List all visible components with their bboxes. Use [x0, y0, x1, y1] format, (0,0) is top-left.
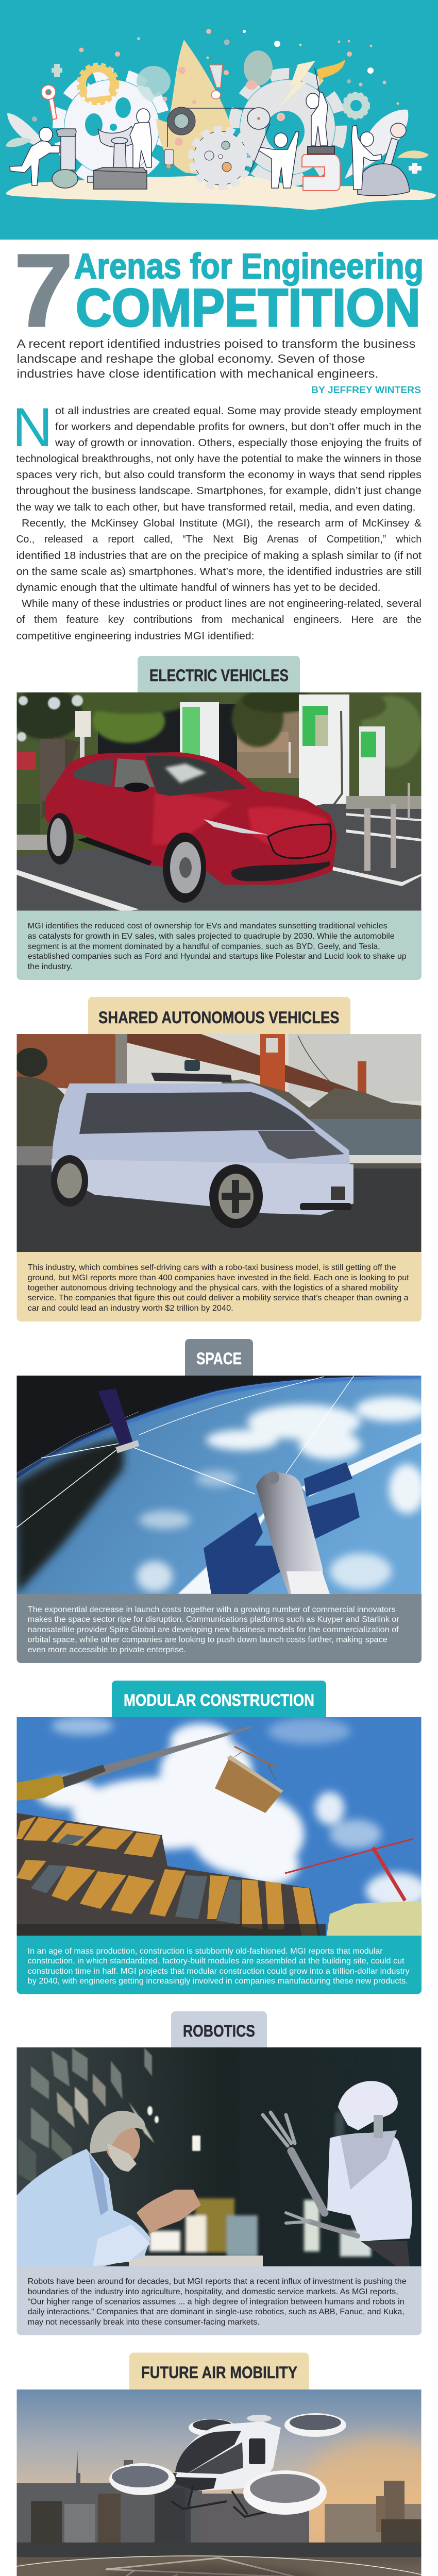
light bulbs	[137, 50, 273, 102]
paragraph 1: way of growth or innovation. Others, especially those enjoying the fruits of	[55, 437, 422, 449]
caption panel: robotics: “Our higher range of scenarios assumes ... a high degree of integration between humans and robots in	[28, 2298, 405, 2306]
tab: space: SPACE	[196, 1349, 242, 1368]
section: electric vehicles	[10, 656, 423, 980]
skids	[172, 2486, 268, 2517]
figure at lever	[351, 125, 382, 190]
tab: future air mobility	[129, 2352, 309, 2389]
paragraph 1: technological breakthroughs, not only have the potential to make the winners in those	[16, 453, 422, 465]
section: robotics	[16, 2011, 422, 2335]
white and grey leaves	[6, 110, 429, 179]
cream leaf shape	[156, 40, 232, 175]
van wheels	[51, 1155, 263, 1228]
helipad deck	[16, 2557, 422, 2576]
title	[14, 232, 424, 348]
caption panel: robotics: may not necessarily break into these consumer-facing markets.	[28, 2318, 260, 2327]
light beams	[178, 1433, 422, 1594]
lifted module	[215, 1747, 283, 1813]
caption panel: space	[16, 1594, 422, 1663]
caption panel: robotics: boundaries of the industry into agriculture, hospitality, and domestic service markets. As MGI reports,	[28, 2287, 398, 2296]
caption panel: electric vehicles: as catalysts for growth in EV sales, with sales projected to quadruple by 2030. While the automobile	[28, 932, 395, 941]
solar panels	[204, 1462, 360, 1594]
plus marks	[52, 64, 422, 174]
ground	[16, 1146, 53, 1165]
caption panel: robotics: Robots have been around for decades, but MGI reports that a recent influx of investment is pushing the	[28, 2277, 407, 2286]
figure on press	[130, 109, 151, 168]
caption panel: electric vehicles	[16, 911, 422, 980]
body text	[12, 396, 422, 642]
tab: electric vehicles: ELECTRIC VEHICLES	[149, 666, 289, 685]
worker figures	[10, 92, 382, 190]
intro deck: landscape and reshape the global economy. Seven of those	[16, 352, 365, 365]
tab: future air mobility: FUTURE AIR MOBILITY	[141, 2363, 297, 2382]
robot	[263, 2081, 412, 2266]
hills	[222, 1079, 422, 1121]
bolt machine	[52, 129, 78, 188]
rail	[16, 2543, 422, 2557]
photo: eVTOL over city helipad	[16, 2389, 438, 2576]
parking sign	[75, 711, 91, 758]
charging stations	[180, 694, 385, 806]
figure with flag	[306, 92, 328, 146]
man's hands	[137, 2190, 201, 2233]
yellow gear	[79, 65, 117, 103]
caption panel: modular construction: construction, in which standardized, factory-built modules are assembled at the building site, could cut	[28, 1957, 405, 1965]
paragraph 2	[16, 518, 422, 594]
clouds	[137, 1397, 428, 1592]
big white gear	[58, 74, 165, 181]
caption panel: shared autonomous vehicles: together autonomous driving technology and the physical cars, with the logistics of a shared mobility	[28, 1284, 398, 1292]
front gear	[192, 129, 249, 187]
photo: crane lifting building module	[16, 1717, 428, 1936]
figure pushing bolt	[10, 127, 60, 185]
confetti dots and plus signs	[79, 29, 386, 146]
caption panel: robotics	[16, 2266, 422, 2335]
intro deck: A recent report identified industries poised to transform the business	[16, 337, 415, 350]
pavement	[16, 804, 422, 911]
tab: space	[185, 1339, 253, 1376]
robot arms	[263, 2112, 358, 2236]
big grey gear	[234, 74, 341, 181]
caption panel: shared autonomous vehicles: This industry, which combines self-driving cars with a robo-taxi business model, is still getting off the	[28, 1263, 396, 1272]
caption panel: shared autonomous vehicles: car and could lead an industry worth $2 trillion by 2040.	[28, 1304, 233, 1313]
small gear	[344, 93, 368, 118]
caption panel: modular construction: construction time in half. MGI projects that modular construction could grow into a trillion-dollar industry	[28, 1967, 410, 1976]
roof sensor	[151, 1060, 232, 1082]
small satellite	[98, 1388, 140, 1453]
paragraph 1	[16, 405, 422, 513]
background lights	[149, 2112, 371, 2257]
tab: electric vehicles	[138, 656, 300, 692]
man's head	[90, 2111, 145, 2172]
paragraph 1: for workers and dependable profits for owners, but don’t offer much in the	[55, 421, 422, 433]
tab: shared autonomous vehicles: SHARED AUTONOMOUS VEHICLES	[98, 1008, 339, 1027]
lever dome	[358, 123, 410, 196]
van body	[52, 1083, 353, 1215]
intro deck: industries have close identification with mechanical engineers.	[16, 367, 378, 380]
caption panel: shared autonomous vehicles: service. The companies that figure this out could deliver a mobility service that’s cheaper than owning a	[28, 1294, 409, 1302]
caption panel: electric vehicles: segment is at the moment dominated by a handful of companies, such as BYD, Geely, and Tesla,	[28, 942, 380, 951]
caption panel: modular construction	[16, 1936, 422, 1994]
byline: BY JEFFREY WINTERS	[311, 385, 421, 395]
paragraph 2: Recently, the McKinsey Global Institute (MGI), the research arm of McKinsey &	[22, 518, 422, 529]
tower crane	[285, 1839, 413, 1901]
photo: man talking with humanoid robot	[16, 2047, 422, 2266]
flag	[315, 59, 345, 116]
city skyline	[16, 2450, 422, 2543]
caption panel: robotics: daily interactions.” Companies that are dominant in single-use robotics, such as ABB, Fanuc, and Kuka,	[28, 2308, 405, 2316]
caption panel: electric vehicles: MGI identifies the reduced cost of ownership for EVs and mandates sunsetting traditional vehicles	[28, 922, 388, 930]
paragraph 2: Co., released a report called, “The Next Big Arenas of Competition,” which	[16, 534, 422, 545]
paragraph 3: of them feature key contributions from mechanical engineers. Here are the	[16, 614, 422, 625]
caption panel: space: nanosatellite provider Spire Global are developing new business models for the commercialization of	[28, 1625, 399, 1634]
car body	[45, 752, 336, 885]
paragraph 3: While many of these industries or product lines are not engineering-related, several	[22, 598, 422, 609]
robot head	[338, 2081, 398, 2130]
key icon	[41, 85, 57, 120]
yellow building	[327, 1901, 421, 1936]
paragraph 1: the way we talk to each other, but have transformed retail, media, and even dating.	[16, 502, 416, 513]
title line 2: COMPETITION	[76, 278, 420, 338]
section: future air mobility	[16, 2352, 438, 2576]
paragraph 1: throughout the business landscape. Smartphones, for example, didn’t just change	[16, 485, 422, 497]
island ground	[6, 175, 436, 210]
section: modular construction	[16, 1681, 428, 1994]
bridge	[127, 1034, 366, 1093]
lightning bolt	[279, 61, 315, 107]
paragraph 1: ot all industries are created equal. Some may provide steady employment	[55, 405, 422, 417]
caption panel: shared autonomous vehicles	[16, 1252, 422, 1321]
caption panel: space: The exponential decrease in launch costs together with a growing number of commercial innovators	[28, 1605, 396, 1614]
tab: modular construction	[112, 1681, 326, 1717]
magnet	[302, 146, 340, 191]
tab: robotics	[171, 2011, 267, 2047]
aircraft	[109, 2413, 346, 2517]
caption panel: modular construction: by 2040, with engineers getting increasingly involved in companies manufacturing these new products.	[28, 1977, 408, 1986]
cockpit glass	[175, 2431, 265, 2491]
photo: autonomous van at Golden Gate Bridge	[14, 1034, 422, 1252]
press machine	[88, 126, 147, 189]
caption panel: modular construction: In an age of mass production, construction is stubbornly old-fashioned. MGI reports that modular	[28, 1947, 383, 1956]
tab: shared autonomous vehicles	[88, 997, 350, 1034]
clouds	[36, 1717, 350, 1886]
section: space	[16, 1339, 428, 1663]
grille and trim	[77, 819, 331, 881]
crane boom	[16, 1726, 251, 1801]
van windows	[79, 1092, 315, 1134]
drop cap: N	[12, 396, 53, 458]
caption panel: electric vehicles: the industry.	[28, 962, 73, 971]
tab: modular construction: MODULAR CONSTRUCTION	[124, 1691, 314, 1709]
pulley and belt	[164, 107, 270, 173]
caption panel: electric vehicles: established companies such as Ford and Hyundai and startups like Polestar and Lucid look to shake up	[28, 952, 407, 961]
building	[16, 1813, 321, 1936]
caption panel: space: makes the space sector ripe for disruption. Communications platforms such as Kuyper and Starlink or	[28, 1615, 399, 1624]
paragraph 3	[16, 598, 422, 642]
caption panel: space: even more accessible to private enterprise.	[28, 1646, 186, 1654]
exclamation mark	[209, 65, 223, 99]
paragraph 2: on the same scale as) smartphones. What’s more, the identified industries are still	[16, 566, 422, 578]
front rotors	[109, 2463, 327, 2515]
rear rotors	[189, 2413, 346, 2437]
station body	[256, 1471, 330, 1594]
paragraph 1: spaces very rich, but also could transform the economy in ways that send ripples	[16, 469, 422, 481]
car wheels	[47, 813, 206, 903]
figure waving	[259, 132, 299, 188]
paragraph 2: identified 18 industries that are on the precipice of making a splash similar to (if not	[16, 550, 422, 562]
photo: red electric car at charging station	[10, 687, 423, 912]
caption panel: space: orbital space, while other companies are looking to push down launch costs further, making space	[28, 1635, 388, 1645]
man	[16, 2111, 201, 2266]
photo: space station above Earth	[16, 1376, 428, 1594]
paragraph 2: dynamic enough that the ultimate handful of winners has yet to be decided.	[16, 582, 380, 594]
section: shared autonomous vehicles	[14, 997, 422, 1321]
tab: robotics: ROBOTICS	[183, 2022, 255, 2040]
paragraph 3: competitive engineering industries MGI identified:	[16, 631, 254, 642]
orbital beams	[16, 1376, 354, 1528]
numeral 7: 7	[14, 232, 73, 348]
ceiling tiles	[18, 2048, 155, 2184]
hero illustration: engineers and machines	[0, 0, 438, 240]
caption panel: shared autonomous vehicles: ground, but MGI reports more than 400 companies have invested in the field. Each one is looking to put	[28, 1274, 409, 1282]
intro deck	[16, 337, 415, 380]
car windows	[74, 756, 247, 796]
